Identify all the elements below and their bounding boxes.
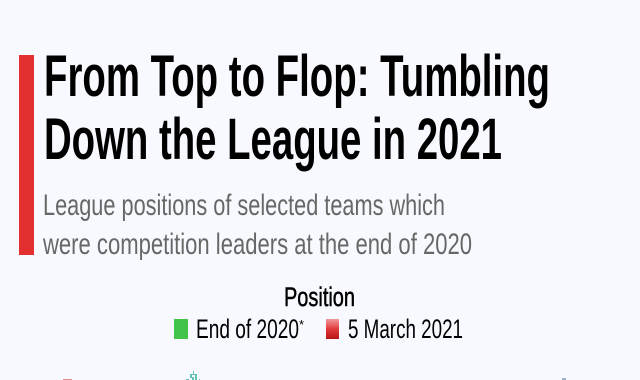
subtitle: were competition leaders at the end of 2020 — [42, 228, 472, 261]
title — [44, 44, 550, 172]
legend title: Position — [284, 282, 355, 312]
icon: red club crest — [63, 379, 72, 380]
legend: end of 2020 — [174, 314, 304, 344]
legend: end of 2020: * — [299, 317, 304, 332]
legend: end of 2020: End of 2020 — [196, 314, 299, 344]
accent bar — [19, 55, 34, 255]
legend: 5 March 2021: 5 March 2021 — [348, 314, 463, 344]
icon: blue club crest — [562, 378, 566, 380]
subtitle: League positions of selected teams which — [43, 189, 445, 222]
icon: teal club crest — [186, 371, 200, 380]
legend: 5 March 2021 — [326, 314, 463, 344]
subtitle — [42, 189, 472, 261]
